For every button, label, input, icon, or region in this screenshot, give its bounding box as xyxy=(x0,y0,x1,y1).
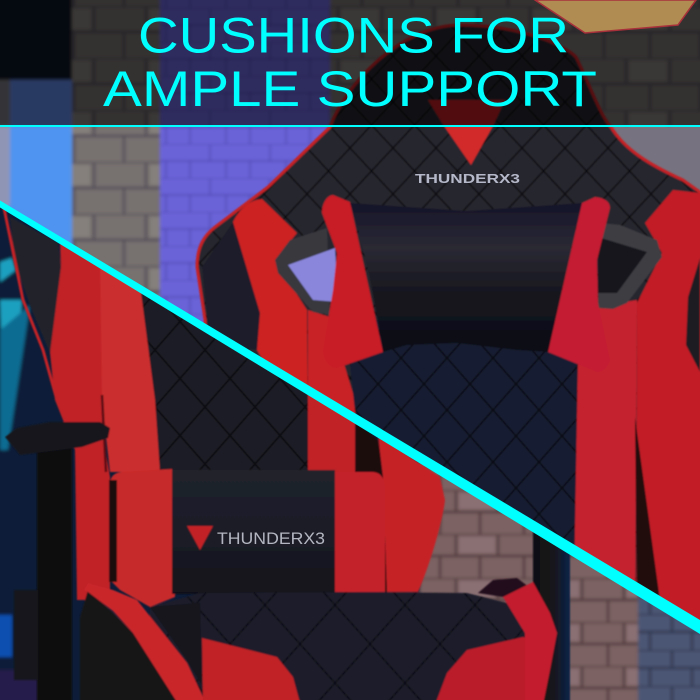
left bolster black xyxy=(80,590,182,700)
left perforated wing xyxy=(10,217,61,353)
title band shade xyxy=(0,0,700,126)
quilted center back xyxy=(140,285,308,472)
lumbar brand text: THUNDERX3 xyxy=(217,530,325,548)
headrest logo mark xyxy=(428,100,505,165)
title: CUSHIONS FOR xyxy=(138,8,569,64)
lower photo: chair seat and lumbar view xyxy=(0,190,700,700)
title rule xyxy=(0,125,700,127)
armrest and post xyxy=(5,422,110,700)
quilted backrest xyxy=(350,320,578,544)
diagonal divider xyxy=(0,200,700,634)
lumbar left red end xyxy=(110,469,175,607)
background: dark monitor glow and stone wall xyxy=(0,190,700,700)
seat left dark panel xyxy=(150,603,202,685)
seat quilted surface xyxy=(150,592,525,700)
pillow right ear xyxy=(548,197,610,372)
lumbar logo icon xyxy=(187,526,213,550)
wing seam xyxy=(102,395,106,472)
right red side and shadow gap xyxy=(308,380,445,592)
seat cushion xyxy=(80,578,557,700)
right black panel xyxy=(686,258,700,372)
lumbar black centre xyxy=(172,470,335,594)
title: AMPLE SUPPORT xyxy=(103,61,597,117)
right red bolster xyxy=(636,190,700,640)
right triangular strap slot xyxy=(598,223,662,309)
pillow centre xyxy=(350,203,582,352)
background: room and stone wall xyxy=(0,0,700,323)
title xyxy=(103,8,597,117)
lumbar cushion xyxy=(109,469,385,607)
left bolster red piping xyxy=(84,583,203,700)
chair shell with red piping xyxy=(197,25,700,640)
left red bolster xyxy=(232,198,308,385)
right bolster red xyxy=(503,582,557,700)
chair lower body xyxy=(4,208,570,700)
neck pillow xyxy=(322,195,610,372)
gold hexagon decoration xyxy=(535,0,696,33)
metal gas post behind seat xyxy=(533,520,570,700)
outer red wing xyxy=(50,243,110,600)
right bolster dark top xyxy=(478,578,533,597)
seat right red panel xyxy=(433,637,535,700)
inner right red strip xyxy=(573,299,638,582)
inner red panel xyxy=(100,269,161,473)
shadow gap xyxy=(635,417,660,600)
left triangular strap slot xyxy=(275,228,338,315)
lumbar right red end xyxy=(330,472,385,592)
chair upper body xyxy=(197,25,700,640)
left inner red strip xyxy=(307,309,357,414)
headrest brand text: THUNDERX3 xyxy=(415,172,520,186)
left perforated wing xyxy=(202,222,260,350)
wing red piping xyxy=(4,208,57,400)
pillow left ear xyxy=(322,195,383,368)
seat left red panel xyxy=(202,638,302,700)
